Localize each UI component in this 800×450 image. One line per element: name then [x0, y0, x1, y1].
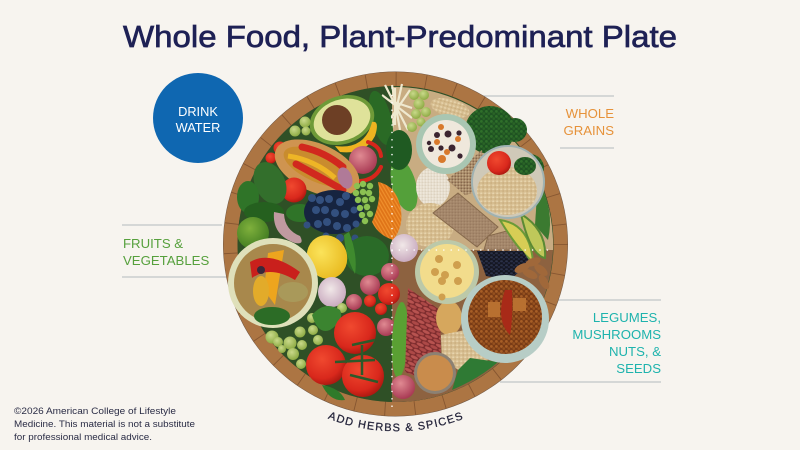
food: parsley — [312, 306, 341, 331]
food: avocado half — [303, 87, 381, 153]
bowl: hummus — [415, 240, 479, 304]
label: fruits and vegetables: VEGETABLES — [123, 253, 209, 268]
label: fruits and vegetables — [122, 225, 230, 277]
callout: drink water — [153, 73, 243, 163]
bowl: peanut butter — [414, 352, 456, 394]
food: lime — [237, 217, 269, 249]
food: carrots — [372, 182, 401, 240]
food: garlic small — [390, 234, 418, 262]
food: yellow pepper — [335, 122, 377, 152]
section: legumes base — [392, 250, 553, 402]
food: taco — [266, 128, 368, 208]
food: chickpea pile — [436, 301, 462, 335]
food: grains — [406, 203, 454, 247]
food: sprouts — [382, 84, 412, 130]
food: mushroom — [274, 212, 302, 243]
food: garlic large — [318, 277, 346, 307]
label: legumes, mushrooms, nuts and seeds: LEGUMES, — [593, 310, 661, 325]
food: lemon — [301, 229, 353, 285]
label: whole grains: GRAINS — [563, 123, 614, 138]
food: green grapes bottom left — [266, 303, 347, 369]
footer disclaimer: for professional medical advice. — [14, 432, 152, 443]
food: bread — [433, 193, 520, 250]
food: avocado slices — [500, 214, 545, 262]
label: legumes, mushrooms, nuts and seeds: NUTS, & — [609, 344, 661, 359]
footer disclaimer — [14, 406, 195, 443]
food: red pepper strips — [360, 142, 381, 181]
food: red potatoes and cherry tomatoes — [346, 263, 400, 336]
label: legumes, mushrooms, nuts and seeds: MUSHROOMS — [572, 327, 661, 342]
label: legumes, mushrooms, nuts and seeds — [500, 300, 661, 382]
label: whole grains — [480, 96, 614, 148]
food: spinach bottom — [452, 358, 498, 390]
bowl: roasted peppers — [228, 238, 318, 328]
callout: drink water: DRINK — [178, 104, 218, 119]
label: whole grains: WHOLE — [566, 106, 614, 121]
label: legumes, mushrooms, nuts and seeds: SEEDS — [616, 361, 661, 376]
bowl: lentil stew — [461, 275, 549, 363]
title: Whole Food, Plant-Predominant Plate — [123, 19, 677, 54]
food: grain patch top — [428, 94, 472, 122]
footer disclaimer: Medicine. This material is not a substitute — [14, 419, 195, 430]
wooden rim — [223, 72, 568, 416]
food: cherry tomatoes — [266, 142, 286, 164]
label: fruits and vegetables: FRUITS & — [123, 236, 183, 251]
curved text: add herbs and spices: ADD HERBS & SPICES — [328, 412, 462, 432]
food: almonds — [513, 256, 551, 291]
food: lettuce and spinach centre — [344, 232, 389, 276]
food: radish — [349, 146, 377, 174]
bowl: glass with grains and tomato — [472, 146, 544, 218]
food: quinoa bottom — [441, 330, 488, 372]
food: green herbs top centre — [364, 88, 423, 214]
food: green grapes top — [407, 90, 431, 132]
food: rice — [416, 167, 450, 207]
food: spinach — [237, 157, 314, 222]
food: peas — [353, 181, 375, 224]
food: kidney beans — [405, 288, 441, 378]
plate — [223, 72, 568, 416]
food: black beans — [477, 251, 530, 280]
food: tomatoes on vine — [306, 312, 384, 400]
food: radish bottom — [391, 375, 415, 399]
food: tomato — [282, 178, 306, 202]
footer disclaimer: ©2026 American College of Lifestyle — [14, 406, 176, 417]
food: green grapes left — [290, 116, 310, 136]
callout: drink water: WATER — [176, 120, 220, 135]
food: blueberries — [304, 190, 364, 242]
bowl: rice with raisins — [416, 114, 476, 174]
section: grains base — [392, 87, 553, 250]
food: greens right edge — [535, 180, 550, 240]
food: broccoli — [465, 106, 544, 182]
food: lettuce centre-bottom — [390, 302, 410, 378]
dotted divider lines — [392, 88, 552, 408]
food: quinoa — [447, 150, 485, 195]
